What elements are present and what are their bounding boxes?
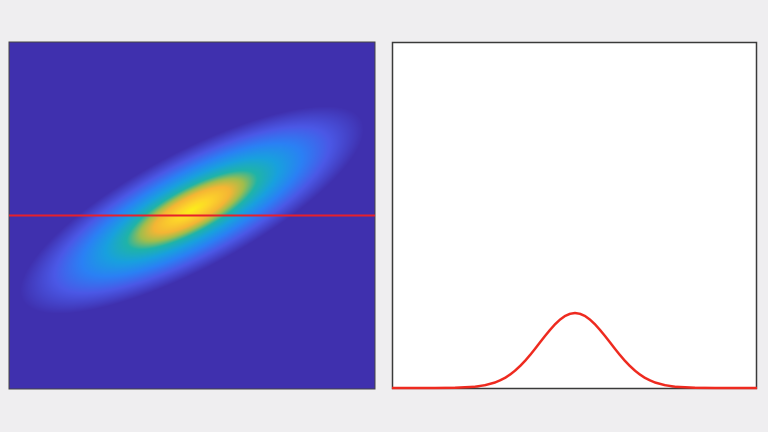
panel: heatmap: [0, 42, 389, 389]
gaussian ellipse: [0, 69, 389, 351]
red slice line: [9, 214, 375, 216]
gaussian curve: [392, 313, 757, 388]
panel: slice plot: [392, 42, 757, 388]
